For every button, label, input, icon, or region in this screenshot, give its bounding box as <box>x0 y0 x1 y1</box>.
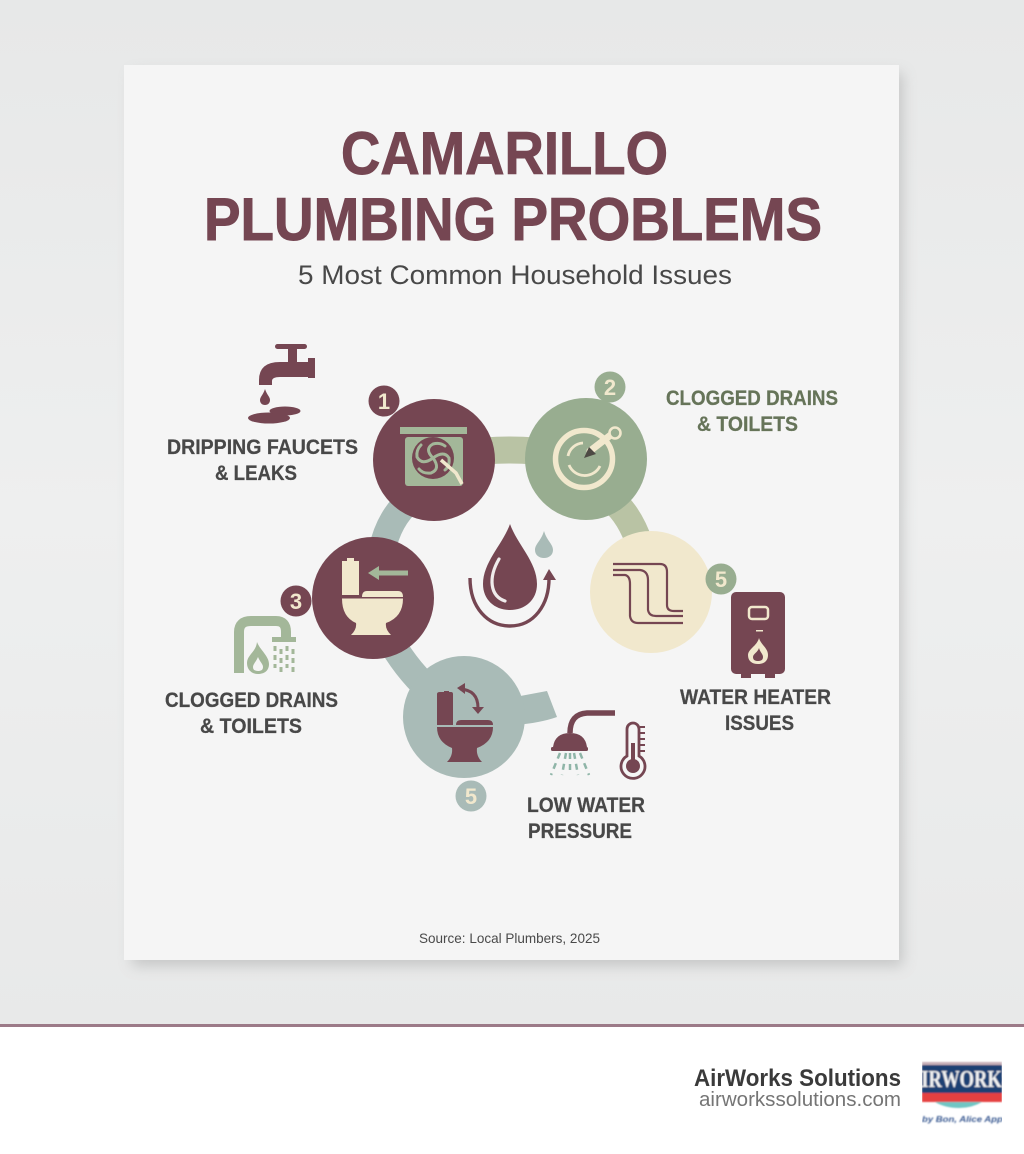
step 1 circle: clogged drain icon <box>373 399 495 521</box>
icon: central water drop with cycle arrow <box>470 524 556 626</box>
step 5 circle: toilet flush icon <box>403 656 525 778</box>
step 4 badge: 5 <box>715 567 727 592</box>
label: dripping faucets: DRIPPING FAUCETS <box>167 436 358 459</box>
step 1 badge: 1 <box>378 389 390 414</box>
panel: poster card <box>124 65 899 960</box>
label: low water pressure <box>527 794 645 843</box>
label: clogged drains left <box>165 689 338 738</box>
label: clogged drains left: CLOGGED DRAINS <box>165 689 338 712</box>
step 5 badge <box>456 780 486 812</box>
icon: thermometer <box>621 723 645 778</box>
label: dripping faucets <box>167 436 358 485</box>
label: clogged drains top right: & TOILETS <box>697 413 798 436</box>
label: clogged drains top right: CLOGGED DRAINS <box>666 387 838 410</box>
icon: dripping faucet <box>248 344 315 424</box>
footer website: airworkssolutions.com <box>699 1089 901 1111</box>
step 4 circle: pipes icon <box>590 531 712 653</box>
icon: green shower pipe with flame <box>239 621 296 674</box>
subtitle: 5 Most Common Household Issues <box>298 260 732 290</box>
label: clogged drains top right <box>666 387 838 436</box>
step 2 circle: drain snake icon <box>525 398 647 520</box>
label: dripping faucets: & LEAKS <box>215 462 297 485</box>
label: low water pressure: PRESSURE <box>528 820 632 843</box>
step 2 badge <box>594 372 626 402</box>
icon: shower head <box>551 713 615 775</box>
label: low water pressure: LOW WATER <box>527 794 645 817</box>
source note: Source: Local Plumbers, 2025 <box>419 930 600 946</box>
label: water heater issues <box>680 686 831 735</box>
step 5 badge: 5 <box>465 784 477 809</box>
title: CAMARILLO <box>341 120 668 187</box>
title: PLUMBING PROBLEMS <box>204 186 822 253</box>
footer brand name: AirWorks Solutions <box>694 1065 901 1092</box>
label: water heater issues: ISSUES <box>725 712 794 735</box>
connecting ring segments <box>382 450 640 725</box>
step 2 badge: 2 <box>604 375 616 400</box>
footer band <box>0 1024 1024 1154</box>
label: water heater issues: WATER HEATER <box>680 686 831 709</box>
title <box>204 120 822 253</box>
step 3 badge <box>280 586 312 616</box>
label: clogged drains left: & TOILETS <box>200 715 302 738</box>
footer logo: by Bon, Alice Appt <box>922 1114 1007 1124</box>
step 3 circle: toilet icon <box>312 537 434 659</box>
step 4 badge <box>706 564 736 594</box>
footer logo <box>922 1061 1002 1124</box>
icon: water heater <box>731 592 785 678</box>
step 3 badge: 3 <box>290 589 302 614</box>
step 1 badge <box>368 386 400 416</box>
